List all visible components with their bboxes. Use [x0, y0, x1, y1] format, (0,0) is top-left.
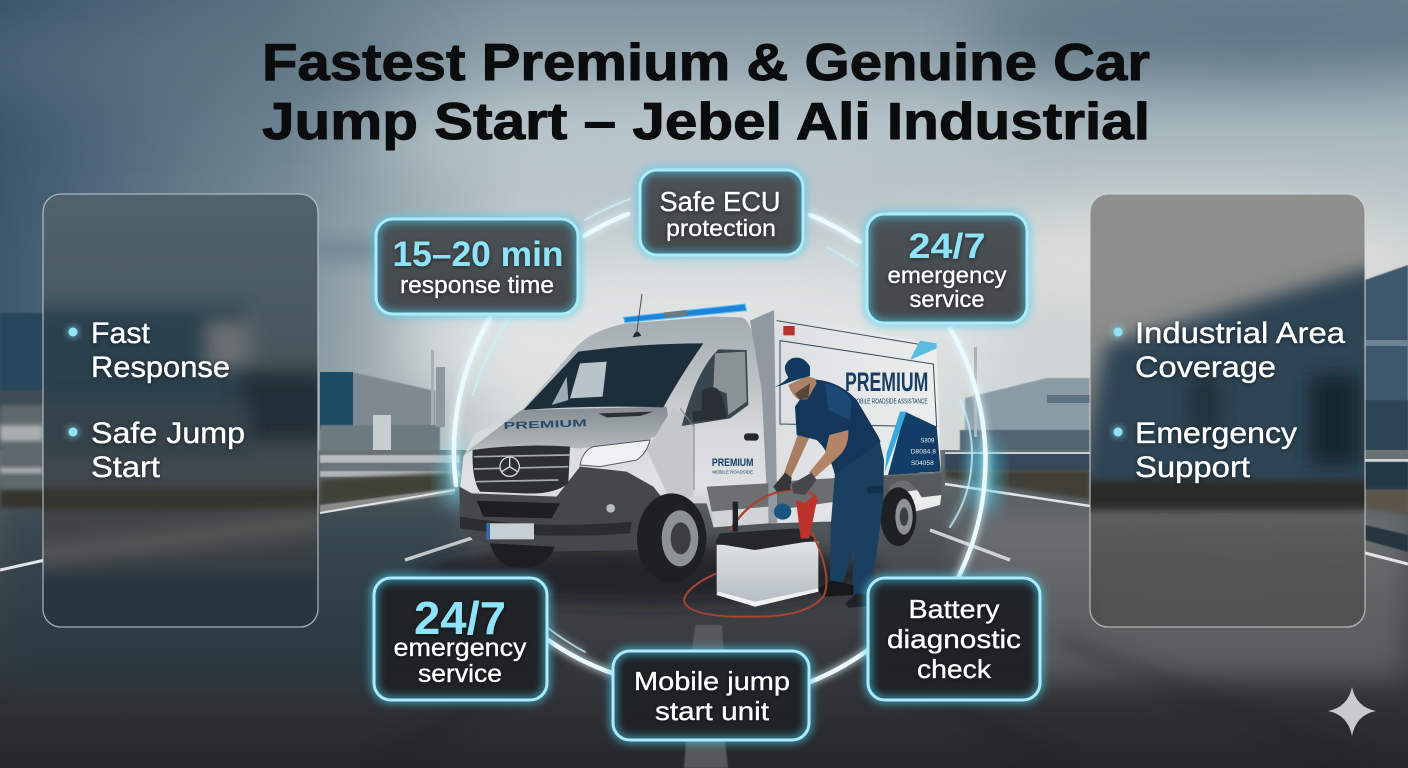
pocket: [867, 486, 883, 493]
number plate: [487, 523, 534, 539]
headlight: [580, 440, 650, 467]
title: Jump Start – Jebel Ali Industrial: [262, 93, 1150, 151]
callout: battery diagnostic check: Battery: [908, 594, 1000, 624]
jump cable on ground: [684, 532, 826, 617]
callout: Safe ECU protection: protection: [666, 215, 776, 241]
glowing ring segments: [442, 199, 998, 682]
head: [788, 376, 817, 399]
battery: [715, 496, 818, 607]
callout: Safe ECU protection: [640, 170, 803, 255]
grille and logo: [473, 446, 570, 494]
callout: 24/7 emergency service (bottom): [374, 578, 547, 700]
title: Fastest Premium & Genuine Car: [262, 34, 1150, 92]
hood vents: [598, 412, 653, 417]
list item: Safe Jump Start: [68, 417, 245, 484]
callout: 24/7 emergency service (bottom): 24/7: [414, 592, 506, 644]
callout: mobile jump start unit: start unit: [655, 696, 770, 726]
panel: right benefits: [1089, 194, 1366, 628]
fog light: [606, 504, 615, 513]
door lettering: PREMIUM: [712, 457, 753, 469]
illustration: van, technician and battery: S04058: [911, 460, 934, 467]
cap: [775, 358, 810, 387]
illustration: van, technician and battery: MOBILE ROADSIDE ASSISTANCE: [852, 396, 928, 405]
callout: battery diagnostic check: check: [917, 654, 992, 684]
callout: response time: [376, 219, 578, 314]
list item: Industrial Area Coverage: Industrial Area: [1135, 317, 1345, 350]
shadow under van: [420, 545, 880, 605]
van lower trim and bumper: [459, 467, 665, 552]
callout: battery diagnostic check: diagnostic: [887, 624, 1021, 654]
list item: Emergency Support: [1114, 417, 1297, 484]
distant buildings: [0, 265, 1408, 455]
callout: 24/7 emergency service (bottom): emergency: [394, 634, 527, 662]
trousers: [830, 440, 884, 597]
rear wheel: [880, 487, 916, 546]
side lettering: PREMIUM: [845, 367, 928, 397]
callout: 24/7 emergency service (top): emergency: [888, 262, 1007, 288]
list item: Fast Response: [68, 317, 230, 384]
list item: Safe Jump Start: Start: [91, 451, 161, 484]
roof beacon and antenna: [623, 294, 747, 337]
centre line dashes: [692, 625, 724, 652]
list item: Safe Jump Start: Safe Jump: [91, 417, 245, 450]
road colour washes: [0, 500, 460, 680]
callout: Safe ECU protection: Safe ECU: [660, 186, 780, 217]
list item: Industrial Area Coverage: Coverage: [1135, 351, 1276, 384]
far arm: [783, 433, 810, 477]
list item: Emergency Support: Emergency: [1135, 417, 1297, 450]
illustration: van, technician and battery: MOBILE ROADSIDE: [712, 469, 753, 474]
list item: Fast Response: Fast: [91, 317, 151, 350]
windshield: [523, 343, 703, 410]
roadside barriers and verge: [0, 405, 1408, 552]
van rear box: [750, 310, 942, 523]
illustration: van, technician and battery: D8084.8: [911, 448, 936, 455]
van cab body: [460, 317, 768, 543]
callout: 24/7 emergency service (top): 24/7: [908, 227, 986, 266]
callout: mobile jump start unit: Mobile jump: [634, 666, 790, 696]
illustration: van, technician and battery: S809: [920, 439, 935, 445]
callout: response time: 15–20 min: [392, 235, 564, 274]
hood lettering: PREMIUM: [503, 418, 587, 432]
callout: 24/7 emergency service (top): [867, 214, 1027, 323]
side window and mirror: [682, 349, 748, 426]
illustration: van, technician and battery: [459, 294, 942, 617]
road markings: [0, 484, 1408, 570]
front wheel: [490, 493, 706, 583]
motion streaks: [380, 640, 1360, 768]
list item: Fast Response: Response: [91, 351, 230, 384]
callout: mobile jump start unit: [613, 651, 809, 740]
callout: response time: response time: [400, 272, 554, 299]
jump cables behind: [730, 490, 817, 530]
panel: left benefits: [30, 194, 330, 635]
shirt: [795, 379, 881, 475]
list item: Emergency Support: Support: [1135, 451, 1251, 484]
list item: Industrial Area Coverage: [1114, 317, 1345, 384]
gloves: [773, 473, 792, 492]
technician: [773, 358, 884, 608]
icon: sparkle watermark: [1328, 687, 1376, 736]
callout: 24/7 emergency service (top): service: [910, 286, 984, 312]
boots: [817, 581, 853, 597]
callout: 24/7 emergency service (bottom): service: [418, 660, 502, 688]
door lines and handle: [680, 408, 759, 490]
callout: battery diagnostic check: [868, 578, 1040, 700]
title: [262, 34, 1150, 151]
near arm: [809, 430, 848, 478]
